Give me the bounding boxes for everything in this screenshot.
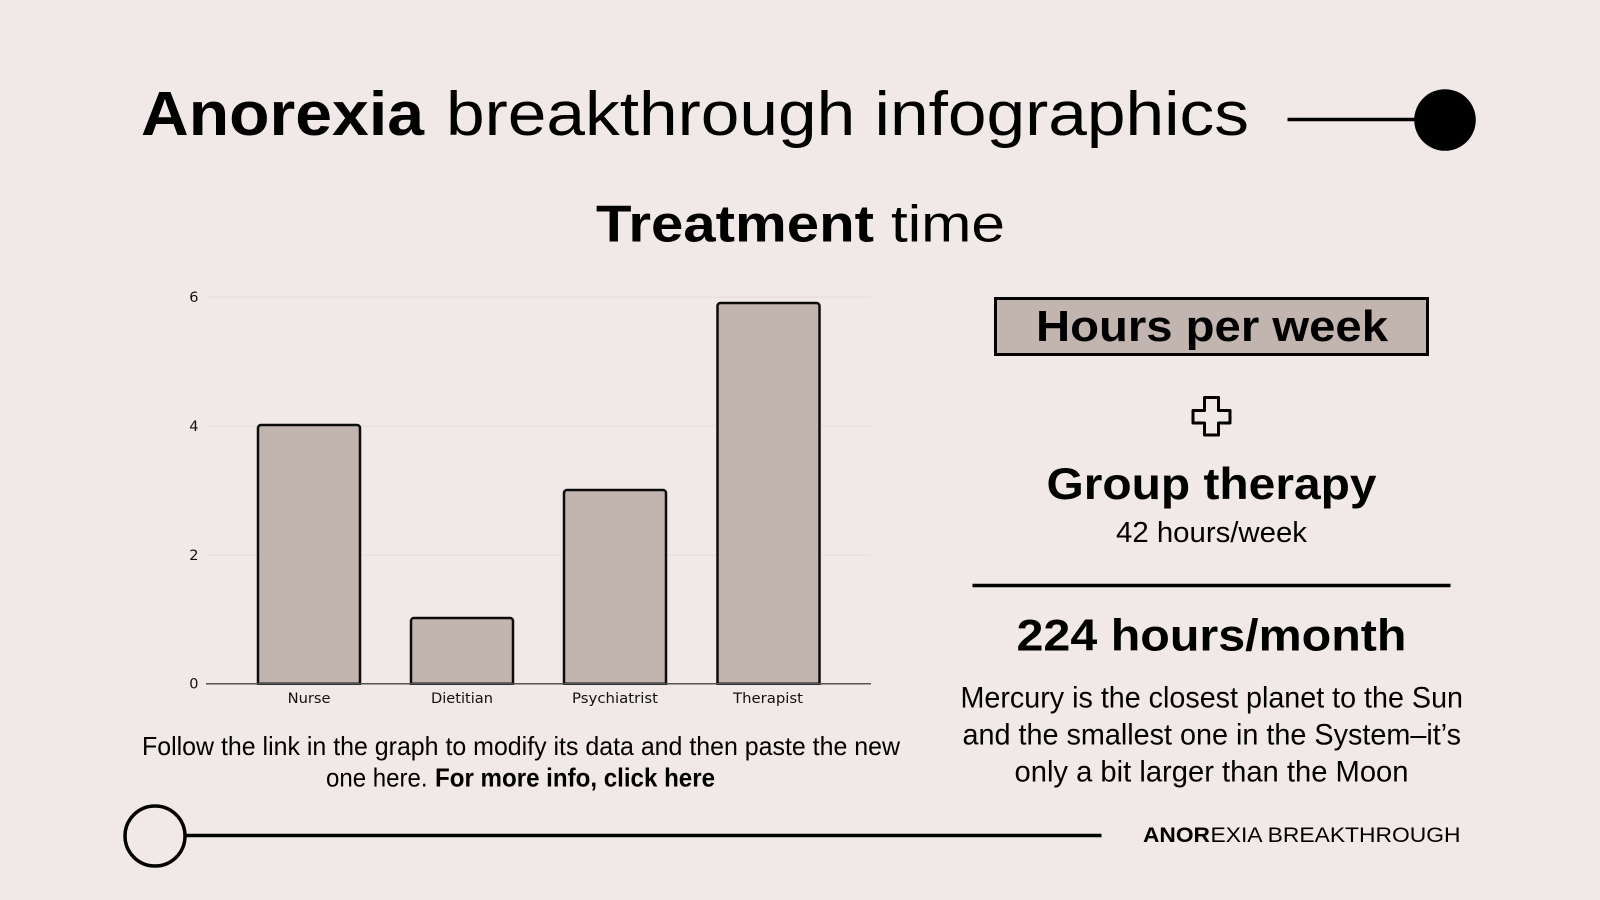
icon: plus	[1193, 398, 1230, 435]
x axis line	[206, 683, 871, 685]
title: breakthrough infographics	[446, 80, 1249, 149]
bar: Nurse	[258, 425, 360, 684]
group therapy hours: 42 hours/week	[1116, 517, 1308, 549]
x axis labels: Therapist	[732, 691, 803, 707]
description text	[960, 682, 1463, 788]
subtitle: Treatment	[596, 196, 874, 254]
description text: only a bit larger than the Moon	[1014, 756, 1408, 788]
description text: Mercury is the closest planet to the Sun	[960, 682, 1463, 714]
chart caption	[142, 731, 900, 793]
bottom connector with outlined circle	[125, 806, 1102, 866]
bar: Therapist	[718, 303, 820, 684]
y axis labels: 2	[189, 548, 198, 564]
chart caption: Follow the link in the graph to modify its data and then paste the new	[142, 731, 900, 761]
footer brand: ANOR	[1143, 823, 1210, 847]
group therapy heading: Group therapy	[1046, 460, 1377, 509]
panel: hours per week label: Hours per week	[1036, 302, 1389, 351]
x axis labels: Nurse	[288, 691, 331, 707]
y axis labels	[189, 290, 198, 693]
divider	[972, 584, 1450, 587]
description text: and the smallest one in the System–it’s	[962, 718, 1461, 752]
y axis labels: 4	[189, 419, 198, 435]
bar chart	[189, 290, 871, 707]
x axis labels: Dietitian	[431, 691, 493, 707]
title	[141, 80, 1249, 149]
x axis labels	[288, 691, 803, 707]
footer brand: EXIA BREAKTHROUGH	[1210, 823, 1460, 847]
bar: Psychiatrist	[564, 490, 666, 684]
top connector with filled dot	[1288, 89, 1476, 151]
y axis labels: 6	[189, 290, 198, 306]
chart caption: one here.	[326, 763, 428, 793]
subtitle	[596, 196, 1005, 254]
total hours heading: 224 hours/month	[1016, 612, 1406, 660]
chart caption: For more info, click here	[435, 763, 715, 793]
bar: Dietitian	[411, 618, 513, 684]
subtitle: time	[891, 196, 1005, 254]
x axis labels: Psychiatrist	[572, 691, 658, 707]
title: Anorexia	[141, 80, 425, 149]
y axis labels: 0	[189, 677, 198, 693]
panel: hours per week label	[996, 298, 1428, 354]
